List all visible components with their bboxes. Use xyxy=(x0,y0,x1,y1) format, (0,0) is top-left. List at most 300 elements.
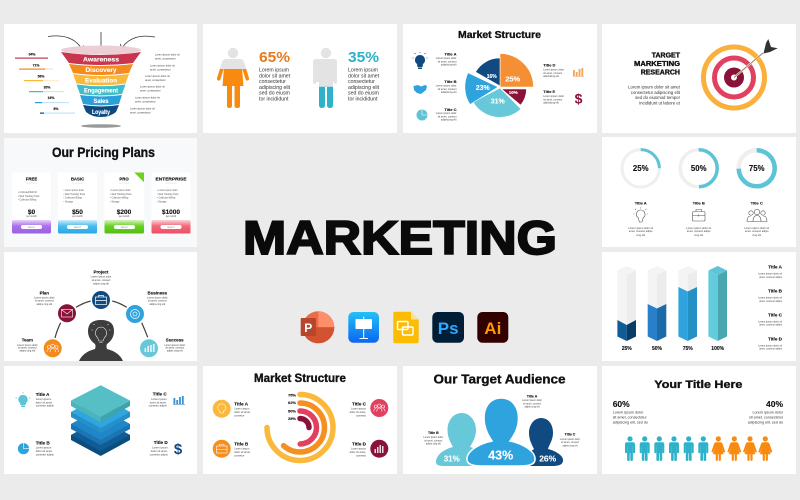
node: success xyxy=(140,339,158,357)
stat: 65 percent: adipiscing elit xyxy=(259,85,291,91)
funnel descriptions xyxy=(130,52,180,114)
heading: RESEARCH xyxy=(641,70,680,76)
icon: chart xyxy=(573,68,584,77)
column: title A xyxy=(628,200,653,237)
item: title C: Title C xyxy=(153,391,167,396)
left titles: adipisicing elit xyxy=(441,119,457,122)
description xyxy=(628,84,681,106)
radial labels: 25% xyxy=(288,416,296,421)
item: title C: Title C xyxy=(352,401,367,406)
pictogram: women 40 percent xyxy=(711,436,772,461)
icon: PowerPoint xyxy=(301,311,334,343)
pie labels: 16% xyxy=(487,74,497,80)
pricing card: free: • Unlimited Bid Fill xyxy=(18,191,37,194)
right titles: sit amet, consect xyxy=(543,98,562,101)
heading: MARKETING xyxy=(634,61,681,68)
item: title A: Title A xyxy=(234,401,249,406)
funnel labels: Discovery xyxy=(86,68,117,74)
item: title D: dolor sit amet, xyxy=(350,450,366,454)
label: team: Lorem ipsum dolor xyxy=(17,344,38,347)
silhouette: 26 percent xyxy=(520,418,563,466)
bar: 50 percent: 50% xyxy=(652,346,663,352)
pricing card: enterprise xyxy=(152,172,190,234)
panel: market structure pie xyxy=(403,24,597,133)
item: title A xyxy=(234,401,251,417)
funnel labels: Sales xyxy=(94,99,109,105)
label: title A: Title A xyxy=(527,394,538,398)
label: business: adipis cing elit xyxy=(149,303,165,306)
icon: title B circle xyxy=(213,440,231,458)
donut: 50 percent xyxy=(680,150,717,187)
item: title C xyxy=(350,401,367,417)
item: title C: Lorem ipsum xyxy=(151,397,167,401)
item: title A: dolor sit amet, xyxy=(36,400,53,404)
label: title A: Lorem ipsum dolor xyxy=(522,399,542,402)
stat: 65 percent xyxy=(259,49,291,102)
radial labels: 75% xyxy=(288,392,296,398)
stat: 65 percent: Lorem ipsum xyxy=(259,68,289,74)
funnel descriptions: Lorem ipsum dolor sit xyxy=(135,96,160,100)
node: project xyxy=(92,291,110,309)
label: plan xyxy=(34,290,55,306)
item: title C: consetur adipis xyxy=(149,404,167,408)
funnel shadow xyxy=(81,124,121,128)
panel: market structure radial xyxy=(203,366,397,474)
pie labels: 25% xyxy=(505,74,521,84)
silhouette with bulb xyxy=(79,320,123,361)
pricing card: pro xyxy=(104,172,144,234)
description: incididunt ut labore et xyxy=(639,100,681,106)
label: business: sit amet, consect xyxy=(148,300,167,303)
pricing card: basic: BASIC xyxy=(71,177,84,182)
bar legend: Title A xyxy=(768,265,783,270)
left titles: sit amet, consect xyxy=(438,60,457,63)
item: title B: dolor sit amet, xyxy=(234,450,251,454)
stat: 35 percent: adipiscing elit xyxy=(348,85,380,91)
bar: 25 percent: 25% xyxy=(622,346,632,352)
left titles: Title A xyxy=(444,52,457,56)
pricing card: pro: SELECT xyxy=(121,227,129,229)
funnel percentage bars: 35% xyxy=(44,86,50,90)
bar: 75 percent xyxy=(678,266,697,352)
icon: man 35 percent xyxy=(313,48,337,108)
icon: Photoshop xyxy=(432,312,464,343)
label: team: adipis cing elit xyxy=(19,350,35,353)
label: plan: Lorem ipsum dolor xyxy=(34,297,55,300)
pricing card: basic xyxy=(58,172,97,234)
funnel percentage bars: 56% xyxy=(38,74,44,78)
item: title D: Lorem ipsum xyxy=(351,447,366,451)
item: title A: dolor sit amet, xyxy=(234,410,251,414)
left titles: adipisicing elit xyxy=(441,64,457,67)
bar legend: Lorem ipsum dolor sit xyxy=(758,273,782,276)
main title: MARKETING xyxy=(243,211,557,264)
funnel labels: Engagement xyxy=(84,88,118,94)
column: title B: amet, consect adipis xyxy=(687,229,711,233)
item: title A: Lorem ipsum xyxy=(234,407,249,411)
label: title C: adipis cing elit xyxy=(562,444,578,448)
item: title A: consetur adipis xyxy=(36,404,54,408)
silhouette: 43 percent xyxy=(467,398,535,466)
donut: 50 percent: 50% xyxy=(691,164,707,173)
left titles: Title C xyxy=(444,107,457,112)
stat: 35 percent: Lorem ipsum xyxy=(348,68,378,74)
radial labels: 62% xyxy=(288,400,296,405)
item: title D: dolor sit amet, xyxy=(151,449,168,453)
funnel descriptions: Lorem ipsum dolor sit xyxy=(145,74,170,78)
label: project: Lorem ipsum dolor xyxy=(91,276,112,279)
heading: Market Structure xyxy=(458,29,541,41)
pricing card: free xyxy=(12,172,51,234)
heading: Market Structure xyxy=(254,373,346,385)
bar legend xyxy=(758,265,783,351)
label: plan: Plan xyxy=(40,290,49,295)
pricing card: free: • Collection Billing xyxy=(18,198,37,202)
label: title A: adipis cing elit xyxy=(524,406,540,409)
label: title C xyxy=(560,433,580,448)
icon: bulb xyxy=(412,52,428,69)
label: title C: Lorem ipsum dolor xyxy=(560,438,580,441)
column: title B: Lorem ipsum dolor sit xyxy=(686,226,711,230)
heading: Our Pricing Plans xyxy=(52,145,155,160)
pricing card: enterprise: per month xyxy=(166,215,177,218)
stat: 40 percent: sit amet, consectetur xyxy=(749,415,784,419)
label: title B: adipis cing elit xyxy=(426,442,441,446)
icon: Keynote xyxy=(348,312,379,343)
bar: 100 percent xyxy=(708,266,727,352)
icon: Google Slides xyxy=(393,312,419,343)
item: title A: Title A xyxy=(36,392,50,397)
pricing card: pro: • Collection Billing xyxy=(110,197,129,200)
icon: title A circle xyxy=(213,400,231,418)
item: title D: Title D xyxy=(352,441,367,446)
pricing card: free: per month xyxy=(26,215,37,218)
item: title D xyxy=(150,440,168,456)
left titles: Lorem ipsum dolor xyxy=(436,57,457,60)
bar: 25 percent xyxy=(617,266,636,352)
heading xyxy=(634,52,681,76)
item: title C: consetur xyxy=(356,413,366,417)
stat: 40 percent: adipiscing elit, sed do xyxy=(748,420,783,424)
icon: pie xyxy=(18,443,29,454)
pricing card: pro: • Storage xyxy=(110,200,120,204)
label: success: Lorem ipsum dolor xyxy=(164,344,185,347)
label: plan: adipis cing elit xyxy=(36,303,52,306)
pricing card: basic: per month xyxy=(72,215,83,218)
column: title B xyxy=(686,200,711,237)
label: title A: sit amet, consect xyxy=(523,402,541,405)
right titles: adipisicing elit xyxy=(543,75,559,78)
icon: dollar: $ xyxy=(174,441,183,458)
pricing card: enterprise: • Storage xyxy=(157,200,167,204)
icon: PowerPoint: P xyxy=(304,321,312,335)
label: business xyxy=(147,290,168,306)
stat: 65 percent: tor incididunt xyxy=(259,96,289,102)
icon: pie xyxy=(416,110,428,120)
node: plan xyxy=(58,304,76,322)
bar legend: amet, consect adipis xyxy=(759,300,783,303)
right titles: Lorem ipsum dolor xyxy=(543,95,564,98)
left titles: adipisicing elit xyxy=(441,91,457,94)
pricing card: free: • Web Tracking Tools xyxy=(18,195,40,198)
description: sed do eiusmod tempor xyxy=(635,95,681,100)
column: title A: Title A xyxy=(635,200,647,206)
label: project xyxy=(91,269,112,285)
pricing card: free: FREE xyxy=(26,177,37,182)
funnel labels: Evaluation xyxy=(85,78,117,84)
right titles: Title E xyxy=(543,89,556,94)
column: title C: Lorem ipsum dolor sit xyxy=(744,226,769,230)
funnel labels xyxy=(83,58,120,116)
left titles: Lorem ipsum dolor xyxy=(436,84,457,88)
stat: 35 percent xyxy=(348,49,380,102)
pictogram: men 60 percent xyxy=(625,436,708,461)
label: success xyxy=(164,338,185,353)
bar: 50 percent xyxy=(648,266,666,352)
label: title B: Lorem ipsum dolor xyxy=(423,436,443,439)
pie labels: 31% xyxy=(491,98,505,106)
item: title B xyxy=(36,440,54,456)
pricing card: free: SELECT xyxy=(28,227,36,229)
funnel labels: Loyalty xyxy=(92,110,111,116)
bar legend: Title B xyxy=(768,289,783,294)
radial bar chart xyxy=(267,394,333,460)
column: title A: cing elit xyxy=(636,233,645,237)
icon: handshake xyxy=(414,85,427,94)
icon: title D circle xyxy=(370,440,388,458)
item: title C: dolor sit amet, xyxy=(150,400,167,404)
item: title A: Lorem ipsum xyxy=(36,397,52,401)
funnel percentage bars: 16% xyxy=(48,96,54,100)
label: business: Business xyxy=(148,290,168,295)
funnel descriptions: Lorem ipsum dolor sit xyxy=(140,84,165,88)
icon: Illustrator xyxy=(477,312,508,343)
label: title B: sit amet, consect xyxy=(424,439,443,442)
silhouette: 31 percent xyxy=(436,413,490,466)
label: project: sit amet, consect xyxy=(92,279,111,282)
label: team: sit amet, consect xyxy=(18,347,37,350)
arc connectors xyxy=(55,301,148,338)
item: title C: dolor sit amet, xyxy=(350,410,366,414)
label: title B xyxy=(423,431,443,446)
stat: 40 percent: 40% xyxy=(766,399,783,409)
label: success: Success xyxy=(166,338,184,343)
column: title C: Title C xyxy=(751,200,763,206)
node: team xyxy=(44,339,62,357)
stat: 40 percent xyxy=(748,399,784,424)
column: title C: cing elit xyxy=(752,233,761,237)
funnel descriptions: amet, consectetur xyxy=(145,78,166,82)
item: title B: Title B xyxy=(36,440,50,445)
bar legend: Title D xyxy=(768,336,783,341)
right titles xyxy=(543,62,564,105)
panel: target audience xyxy=(403,366,597,474)
icon: Illustrator: Ai xyxy=(484,319,501,338)
donut: 75 percent: 75% xyxy=(749,164,765,173)
bar legend: amet, consect adipis xyxy=(759,348,783,351)
funnel bands xyxy=(61,52,141,117)
bar legend: amet, consect adipis xyxy=(759,324,783,327)
item: title B: consetur adipis xyxy=(36,452,54,456)
stat: 65 percent: sed do eiusm xyxy=(259,90,290,96)
column: title B: cing elit xyxy=(694,233,703,237)
funnel labels: Awareness xyxy=(83,58,120,64)
panel: stacked layers xyxy=(4,366,197,474)
pie labels: 10% xyxy=(509,90,518,95)
funnel percentage bars: 8% xyxy=(54,107,58,111)
pie chart xyxy=(465,54,534,117)
item: title C: Lorem ipsum xyxy=(351,407,366,411)
panel: sales funnel xyxy=(4,24,197,133)
icon: target with arrow xyxy=(704,39,778,108)
right titles: Lorem ipsum dolor xyxy=(543,68,564,72)
heading: TARGET xyxy=(652,52,681,60)
item: title C xyxy=(149,391,167,408)
item: title B: dolor sit amet, xyxy=(36,449,53,453)
pricing card: enterprise: SELECT xyxy=(167,227,176,229)
item: title B: Title B xyxy=(234,441,249,446)
pricing card: enterprise: • Collection Billing xyxy=(157,197,176,200)
item: title A: consetur xyxy=(234,413,244,417)
left titles xyxy=(436,52,457,122)
label: plan: sit amet, consect xyxy=(35,300,54,303)
pricing card: basic: SELECT xyxy=(74,227,82,229)
stat: 35 percent: consectetur xyxy=(348,79,375,85)
pricing card: pro: per month xyxy=(119,215,130,218)
stat: 35 percent: dolor sit amet xyxy=(348,73,380,79)
bar legend: amet, consect adipis xyxy=(759,276,783,279)
panel: target marketing research xyxy=(602,24,796,133)
label: title C: Title C xyxy=(565,433,576,437)
item: title D: Lorem ipsum xyxy=(152,446,168,450)
stat: 60 percent xyxy=(613,399,648,424)
pricing card: enterprise: ENTERPRISE xyxy=(156,177,187,182)
description: Lorem ipsum dolor sit amet xyxy=(628,84,681,90)
column: title A: amet, consect adipis xyxy=(629,229,653,233)
column: title B: Title B xyxy=(693,200,705,206)
label: project: Project xyxy=(94,269,109,274)
pricing card: pro: • Web Tracking Tools xyxy=(110,193,132,196)
pricing card: basic: • Storage xyxy=(64,200,74,204)
item: title A xyxy=(36,392,54,408)
donut: 75 percent xyxy=(739,150,775,186)
right titles: Title D xyxy=(543,62,556,68)
donut: 25 percent: 25% xyxy=(633,164,649,173)
stat: 65 percent: dolor sit amet xyxy=(259,73,291,79)
bar legend: Lorem ipsum dolor sit xyxy=(758,297,782,300)
pricing card: pro: • Lorem ipsum dolor xyxy=(110,189,131,192)
stat: 35 percent: tor incididunt xyxy=(348,96,378,102)
pricing card: basic: • Lorem ipsum dolor xyxy=(64,189,84,192)
icon: bulb xyxy=(16,392,30,407)
stat: 60 percent: sit amet, consectetur xyxy=(613,415,647,419)
column: title C xyxy=(744,200,769,237)
pie labels: 23% xyxy=(476,85,490,92)
item: title B xyxy=(234,441,251,457)
funnel descriptions: amet, consectetur xyxy=(150,68,171,72)
audience percentages xyxy=(444,448,557,464)
pricing card: pro: PRO xyxy=(119,177,129,182)
stat: 40 percent: Lorem ipsum dolor xyxy=(752,410,784,414)
label: team xyxy=(17,338,38,353)
node: business xyxy=(126,305,144,323)
label: success: adipis cing elit xyxy=(167,350,183,353)
label: success: sit amet, consect xyxy=(165,347,184,350)
left titles: Lorem ipsum dolor xyxy=(436,112,457,115)
bar: 75 percent: 75% xyxy=(683,346,693,352)
pricing card: free: $0 xyxy=(28,209,35,216)
label: team: Team xyxy=(22,338,33,343)
stat: 35 percent: sed do eiusm xyxy=(348,90,379,96)
left titles: sit amet, consect xyxy=(438,115,457,118)
icon: dollar: $ xyxy=(575,90,583,106)
stat: 60 percent: adipiscing elit, sed do xyxy=(613,420,648,424)
radial labels xyxy=(288,392,296,421)
funnel descriptions: amet, consectetur xyxy=(140,88,161,92)
funnel percentage bars xyxy=(15,52,75,114)
heading: Our Target Audience xyxy=(434,372,566,386)
label: project: adipis cing elit xyxy=(93,282,109,285)
pricing card: enterprise: • Lorem ipsum dolor xyxy=(157,189,178,192)
pricing card: pro: $200 xyxy=(117,209,132,216)
funnel percentage bars: 94% xyxy=(29,52,35,56)
panel: project arc xyxy=(4,252,197,361)
funnel arrows xyxy=(48,32,155,50)
pie labels xyxy=(476,74,521,106)
item: title D: Title D xyxy=(154,440,168,445)
funnel percentage bars: 71% xyxy=(33,64,39,68)
pricing card: basic: • Collection Billing xyxy=(64,197,83,200)
label: title B: Title B xyxy=(428,431,439,435)
right titles: adipisicing elit xyxy=(543,102,559,105)
audience percentages: 26% xyxy=(539,454,557,464)
audience percentages: 43% xyxy=(488,448,513,462)
isometric layer stack xyxy=(71,385,130,456)
right titles: sit amet, consect xyxy=(543,72,562,75)
icon: chart xyxy=(173,396,185,405)
bar: 100 percent: 100% xyxy=(711,346,725,352)
funnel descriptions: amet, consectetur xyxy=(155,56,176,60)
left titles: Title B xyxy=(444,79,457,84)
description: consectetur adipiscing elit xyxy=(631,90,681,95)
item: title D xyxy=(350,441,367,457)
item: title D: consetur adipis xyxy=(150,452,168,456)
stat: 60 percent: Lorem ipsum dolor xyxy=(613,410,644,414)
app icons row xyxy=(301,311,508,343)
radial labels: 50% xyxy=(288,408,296,414)
pricing card: enterprise: • Web Tracking Tools xyxy=(157,193,179,196)
heading: Your Title Here xyxy=(654,379,742,391)
item: title D: consetur xyxy=(356,453,366,457)
panel: gender split xyxy=(203,24,397,133)
funnel descriptions: amet, consectetur xyxy=(130,110,151,114)
funnel descriptions: Lorem ipsum dolor sit xyxy=(130,106,155,110)
bar legend: Lorem ipsum dolor sit xyxy=(758,344,782,347)
stat: 60 percent: 60% xyxy=(613,399,630,409)
left titles: sit amet, consect xyxy=(438,88,457,91)
donut: 25 percent xyxy=(622,150,659,187)
pricing card: enterprise: $1000 xyxy=(162,209,180,216)
label: title A xyxy=(522,394,542,409)
stat: 35 percent: 35% xyxy=(348,49,379,66)
label: business: Lorem ipsum dolor xyxy=(147,297,168,300)
funnel descriptions: Lorem ipsum dolor sit xyxy=(155,52,180,56)
column: title A: Lorem ipsum dolor sit xyxy=(628,226,653,230)
item: title B: Lorem ipsum xyxy=(36,446,52,450)
pricing card: basic: $50 xyxy=(72,209,83,216)
item: title B: Lorem ipsum xyxy=(234,447,249,451)
panel: your title here xyxy=(602,366,796,474)
